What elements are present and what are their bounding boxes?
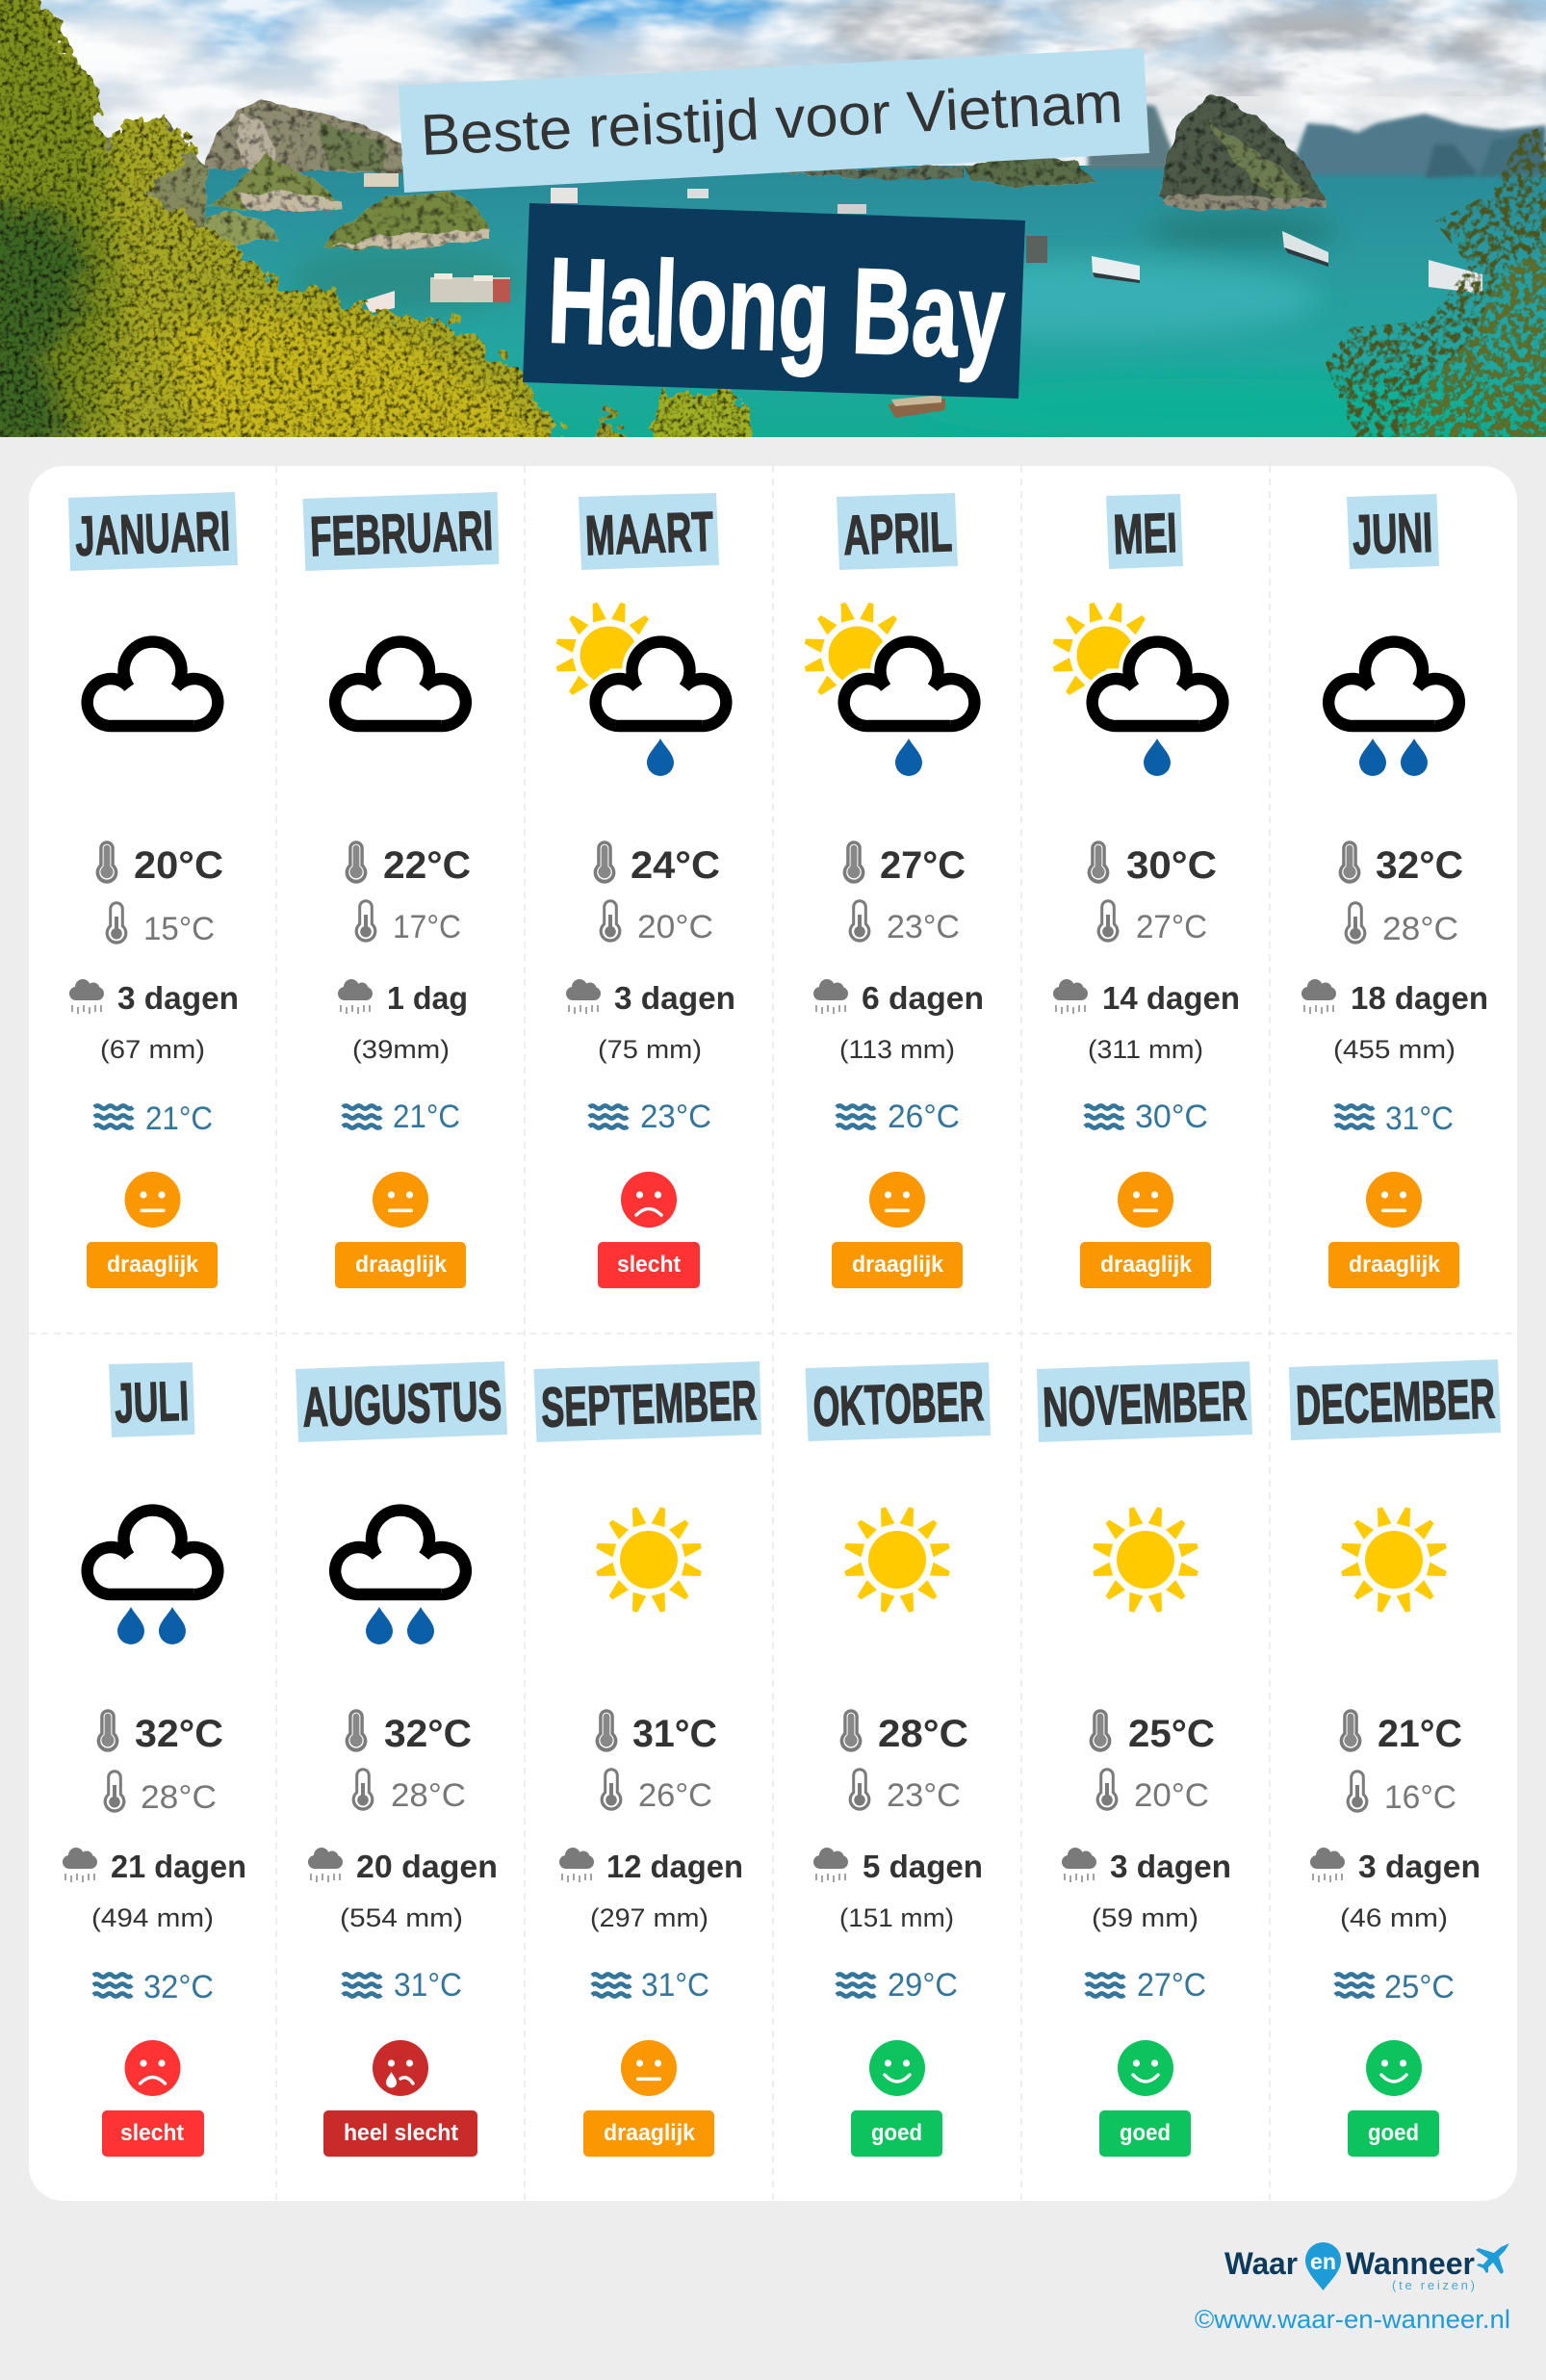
sea temperature — [343, 1099, 460, 1135]
rainfall: (297 mm) — [590, 1903, 709, 1932]
max temperature: 27°C — [880, 844, 966, 887]
rating badge — [1328, 1242, 1459, 1288]
rating badge: draaglijk — [604, 2120, 696, 2146]
icon: mood — [125, 1172, 181, 1228]
sea temperature — [93, 1969, 214, 2005]
left islands — [96, 101, 490, 250]
rating badge — [1099, 2110, 1191, 2157]
min temperature — [849, 899, 960, 945]
month heading — [1347, 494, 1439, 569]
max temperature — [843, 841, 966, 887]
month heading — [296, 1361, 507, 1442]
rain days: 1 dag — [387, 980, 468, 1016]
rainfall: (67 mm) — [100, 1035, 205, 1064]
rainfall: (39mm) — [352, 1035, 450, 1064]
sea temperature: 21°C — [145, 1100, 213, 1137]
rain days: 3 dagen — [1358, 1849, 1481, 1884]
month heading — [579, 493, 719, 570]
rain days — [69, 979, 239, 1016]
icon: sun, cloud and drop — [555, 602, 726, 776]
boats — [364, 173, 1482, 418]
sea temperature: 29°C — [888, 1967, 958, 2004]
month heading — [109, 1362, 194, 1437]
icon: sun, cloud and drop — [1052, 602, 1223, 776]
max temperature: 24°C — [631, 844, 720, 887]
rating badge — [102, 2110, 204, 2157]
rainfall: (75 mm) — [598, 1035, 702, 1064]
rainfall: (554 mm) — [340, 1903, 463, 1932]
rainfall: (455 mm) — [1333, 1035, 1456, 1064]
panel: april — [804, 493, 984, 1288]
max temperature — [840, 1709, 968, 1755]
icon: mood — [869, 1172, 925, 1228]
right tree — [1326, 116, 1546, 453]
sea temperature: 31°C — [641, 1967, 709, 2004]
panel: oktober — [805, 1362, 991, 2157]
rating badge: slecht — [120, 2120, 184, 2146]
icon: cloud and two drops — [88, 1510, 218, 1644]
panel: december — [1289, 1359, 1501, 2157]
min temperature: 28°C — [1382, 911, 1458, 947]
month heading: JANUARI — [74, 500, 231, 568]
sea temperature — [837, 1967, 958, 2004]
sea temperature — [837, 1099, 960, 1135]
rain days: 21 dagen — [111, 1849, 246, 1884]
max temperature: 32°C — [1376, 844, 1463, 887]
icon: sun — [1092, 1506, 1199, 1614]
max temperature — [346, 1709, 472, 1755]
rating badge: goed — [1368, 2120, 1419, 2146]
min temperature: 23°C — [887, 1777, 961, 1814]
rainfall: (113 mm) — [839, 1035, 955, 1064]
month heading: OKTOBER — [812, 1370, 985, 1438]
panel: maart — [555, 493, 735, 1288]
sea temperature — [1335, 1100, 1454, 1137]
min temperature: 27°C — [1136, 909, 1207, 945]
panel: november — [1037, 1361, 1252, 2157]
max temperature — [1340, 1709, 1462, 1755]
min temperature: 20°C — [1134, 1777, 1209, 1814]
rating badge — [87, 1242, 218, 1288]
rain days: 12 dagen — [606, 1849, 743, 1884]
rating badge: heel slecht — [344, 2120, 458, 2146]
max temperature — [97, 1709, 223, 1755]
icon: mood — [125, 2040, 181, 2096]
icon: sun, cloud and drop — [804, 602, 974, 776]
month heading — [837, 493, 958, 570]
sea temperature: 32°C — [143, 1969, 214, 2005]
header photo: Halong Bay — [0, 0, 1546, 453]
sea temperature: 21°C — [393, 1099, 460, 1135]
max temperature — [1088, 841, 1217, 887]
rainfall: (494 mm) — [91, 1903, 214, 1932]
rain days: 3 dagen — [1110, 1849, 1231, 1884]
icon: mood — [1118, 2040, 1173, 2096]
left tree foliage — [0, 0, 759, 453]
max temperature — [96, 841, 223, 887]
rain days — [338, 979, 468, 1016]
max temperature: 22°C — [383, 844, 471, 887]
icon: sun — [1340, 1506, 1448, 1614]
panel: september — [533, 1361, 761, 2157]
month heading — [805, 1362, 991, 1441]
title banner: Halong Bay — [523, 203, 1025, 399]
month heading: APRIL — [842, 501, 953, 567]
rain days — [813, 979, 984, 1016]
logo: Waar en Wanneer: (te reizen) — [1392, 2278, 1475, 2292]
title banner: Beste reistijd voor Vietnam — [399, 48, 1149, 193]
sea temperature: 30°C — [1135, 1099, 1208, 1135]
min temperature — [1345, 901, 1458, 947]
rating badge: goed — [1120, 2120, 1171, 2146]
rating badge: draaglijk — [355, 1252, 448, 1278]
rating badge — [323, 2110, 477, 2157]
sea temperature — [1086, 1967, 1206, 2004]
panel: augustus — [296, 1361, 507, 2157]
icon: cloud — [88, 641, 218, 726]
month heading — [1037, 1361, 1252, 1442]
rain days — [566, 979, 735, 1016]
rating badge — [583, 2110, 714, 2157]
min temperature: 15°C — [143, 911, 215, 947]
month heading: AUGUSTUS — [301, 1369, 502, 1439]
rating badge — [1348, 2110, 1439, 2157]
distant karst hills — [1088, 101, 1546, 178]
min temperature: 16°C — [1384, 1779, 1456, 1816]
icon: mood — [373, 1172, 428, 1228]
max temperature: 30°C — [1126, 844, 1217, 887]
rain days: 3 dagen — [614, 980, 735, 1016]
sea temperature — [592, 1967, 709, 2004]
min temperature — [104, 1770, 217, 1816]
rain days: 14 dagen — [1102, 980, 1240, 1016]
month heading — [1106, 494, 1183, 569]
max temperature: 32°C — [135, 1713, 223, 1755]
rating badge: draaglijk — [852, 1252, 944, 1278]
logo: Waar en Wanneer: Wanneer — [1346, 2246, 1475, 2281]
rainfall: (311 mm) — [1088, 1035, 1203, 1064]
panel: calendar card — [29, 466, 1517, 2201]
logo: Waar en Wanneer — [1224, 2242, 1509, 2292]
max temperature: 21°C — [1378, 1713, 1462, 1755]
rating badge: draaglijk — [1349, 1252, 1441, 1278]
month heading — [533, 1361, 761, 1442]
icon: mood — [621, 1172, 677, 1228]
rating badge: draaglijk — [107, 1252, 199, 1278]
sea temperature — [343, 1967, 462, 2004]
rain days — [1062, 1848, 1231, 1884]
icon: mood — [1118, 1172, 1173, 1228]
rain days: 6 dagen — [862, 980, 984, 1016]
rain days — [813, 1848, 983, 1884]
rainfall: (151 mm) — [839, 1903, 954, 1932]
panel: februari — [302, 492, 499, 1288]
rain days: 3 dagen — [117, 980, 239, 1016]
panel: juni — [1301, 494, 1488, 1288]
sea temperature — [1335, 1969, 1455, 2005]
sea temperature — [1085, 1099, 1208, 1135]
month heading: JUNI — [1352, 502, 1433, 566]
icon: mood — [1366, 2040, 1422, 2096]
rainfall: (46 mm) — [1340, 1903, 1448, 1932]
min temperature: 26°C — [638, 1777, 712, 1814]
min temperature — [849, 1768, 961, 1814]
icon: mood — [621, 2040, 677, 2096]
rain days: 5 dagen — [863, 1849, 983, 1884]
icon: map pin — [1305, 2242, 1341, 2290]
icon: mood — [373, 2040, 428, 2096]
max temperature — [1090, 1709, 1215, 1755]
max temperature: 28°C — [878, 1713, 968, 1755]
sea temperature: 23°C — [640, 1099, 711, 1135]
sea temperature — [589, 1099, 711, 1135]
rain days: 18 dagen — [1351, 980, 1488, 1016]
icon: mood — [869, 2040, 925, 2096]
max temperature: 25°C — [1128, 1713, 1215, 1755]
rain days — [1310, 1848, 1481, 1884]
rating badge — [832, 1242, 963, 1288]
rating badge: slecht — [617, 1252, 681, 1278]
rating badge — [335, 1242, 466, 1288]
min temperature — [1096, 1768, 1209, 1814]
icon: sun — [595, 1506, 703, 1614]
max temperature — [1339, 841, 1463, 887]
big karst island right — [1159, 94, 1327, 210]
rain days: 20 dagen — [356, 1849, 498, 1884]
min temperature — [352, 1768, 466, 1814]
title banner: Halong Bay: Halong Bay — [546, 232, 1007, 384]
rating badge: draaglijk — [1100, 1252, 1193, 1278]
rating badge: goed — [871, 2120, 922, 2146]
sea — [204, 166, 1546, 437]
sea temperature: 31°C — [394, 1967, 462, 2004]
sea temperature — [94, 1100, 213, 1137]
min temperature: 28°C — [141, 1779, 217, 1816]
islands middle right — [770, 158, 1096, 186]
month heading: MEI — [1112, 502, 1178, 566]
icon: airplane — [1476, 2243, 1509, 2274]
month heading — [302, 492, 499, 571]
column and row dividers — [29, 466, 1517, 2201]
month heading: NOVEMBER — [1042, 1369, 1248, 1439]
icon: sun — [843, 1506, 951, 1614]
min temperature: 23°C — [887, 909, 960, 945]
rating badge — [598, 1242, 700, 1288]
min temperature — [106, 901, 215, 947]
max temperature: 31°C — [632, 1713, 717, 1755]
month heading — [68, 492, 238, 571]
max temperature: 20°C — [134, 844, 223, 887]
max temperature — [346, 841, 471, 887]
rating badge — [851, 2110, 942, 2157]
rainfall: (59 mm) — [1092, 1903, 1198, 1932]
max temperature — [594, 841, 720, 887]
icon: cloud and two drops — [335, 1510, 466, 1644]
min temperature — [1347, 1770, 1456, 1816]
rating badge — [1080, 1242, 1211, 1288]
sea temperature: 26°C — [888, 1099, 960, 1135]
min temperature: 20°C — [637, 909, 713, 945]
icon: map pin: en — [1310, 2249, 1336, 2274]
sea temperature: 31°C — [1385, 1100, 1454, 1137]
month heading: SEPTEMBER — [540, 1369, 758, 1439]
logo: Waar en Wanneer: Waar — [1224, 2246, 1298, 2281]
panel: januari — [68, 492, 239, 1288]
min temperature — [600, 899, 713, 945]
min temperature: 17°C — [393, 909, 461, 945]
title banner: Beste reistijd voor Vietnam: Beste reistijd voor Vietnam — [419, 70, 1124, 168]
icon: mood — [1366, 1172, 1422, 1228]
panel: juli — [63, 1362, 246, 2157]
month heading: MAART — [584, 501, 714, 567]
month heading: FEBRUARI — [309, 500, 494, 568]
max temperature: 32°C — [384, 1713, 472, 1755]
max temperature — [596, 1709, 717, 1755]
website credit: ©www.waar-en-wanneer.nl — [1195, 2305, 1510, 2334]
sea temperature: 25°C — [1384, 1969, 1455, 2005]
sea temperature: 27°C — [1137, 1967, 1206, 2004]
month heading: JULI — [114, 1370, 190, 1435]
min temperature — [355, 899, 461, 945]
icon: cloud — [335, 641, 466, 726]
min temperature: 28°C — [391, 1777, 466, 1814]
min temperature — [1097, 899, 1207, 945]
icon: cloud and two drops — [1328, 641, 1459, 776]
panel: mei — [1052, 494, 1240, 1288]
min temperature — [601, 1768, 712, 1814]
